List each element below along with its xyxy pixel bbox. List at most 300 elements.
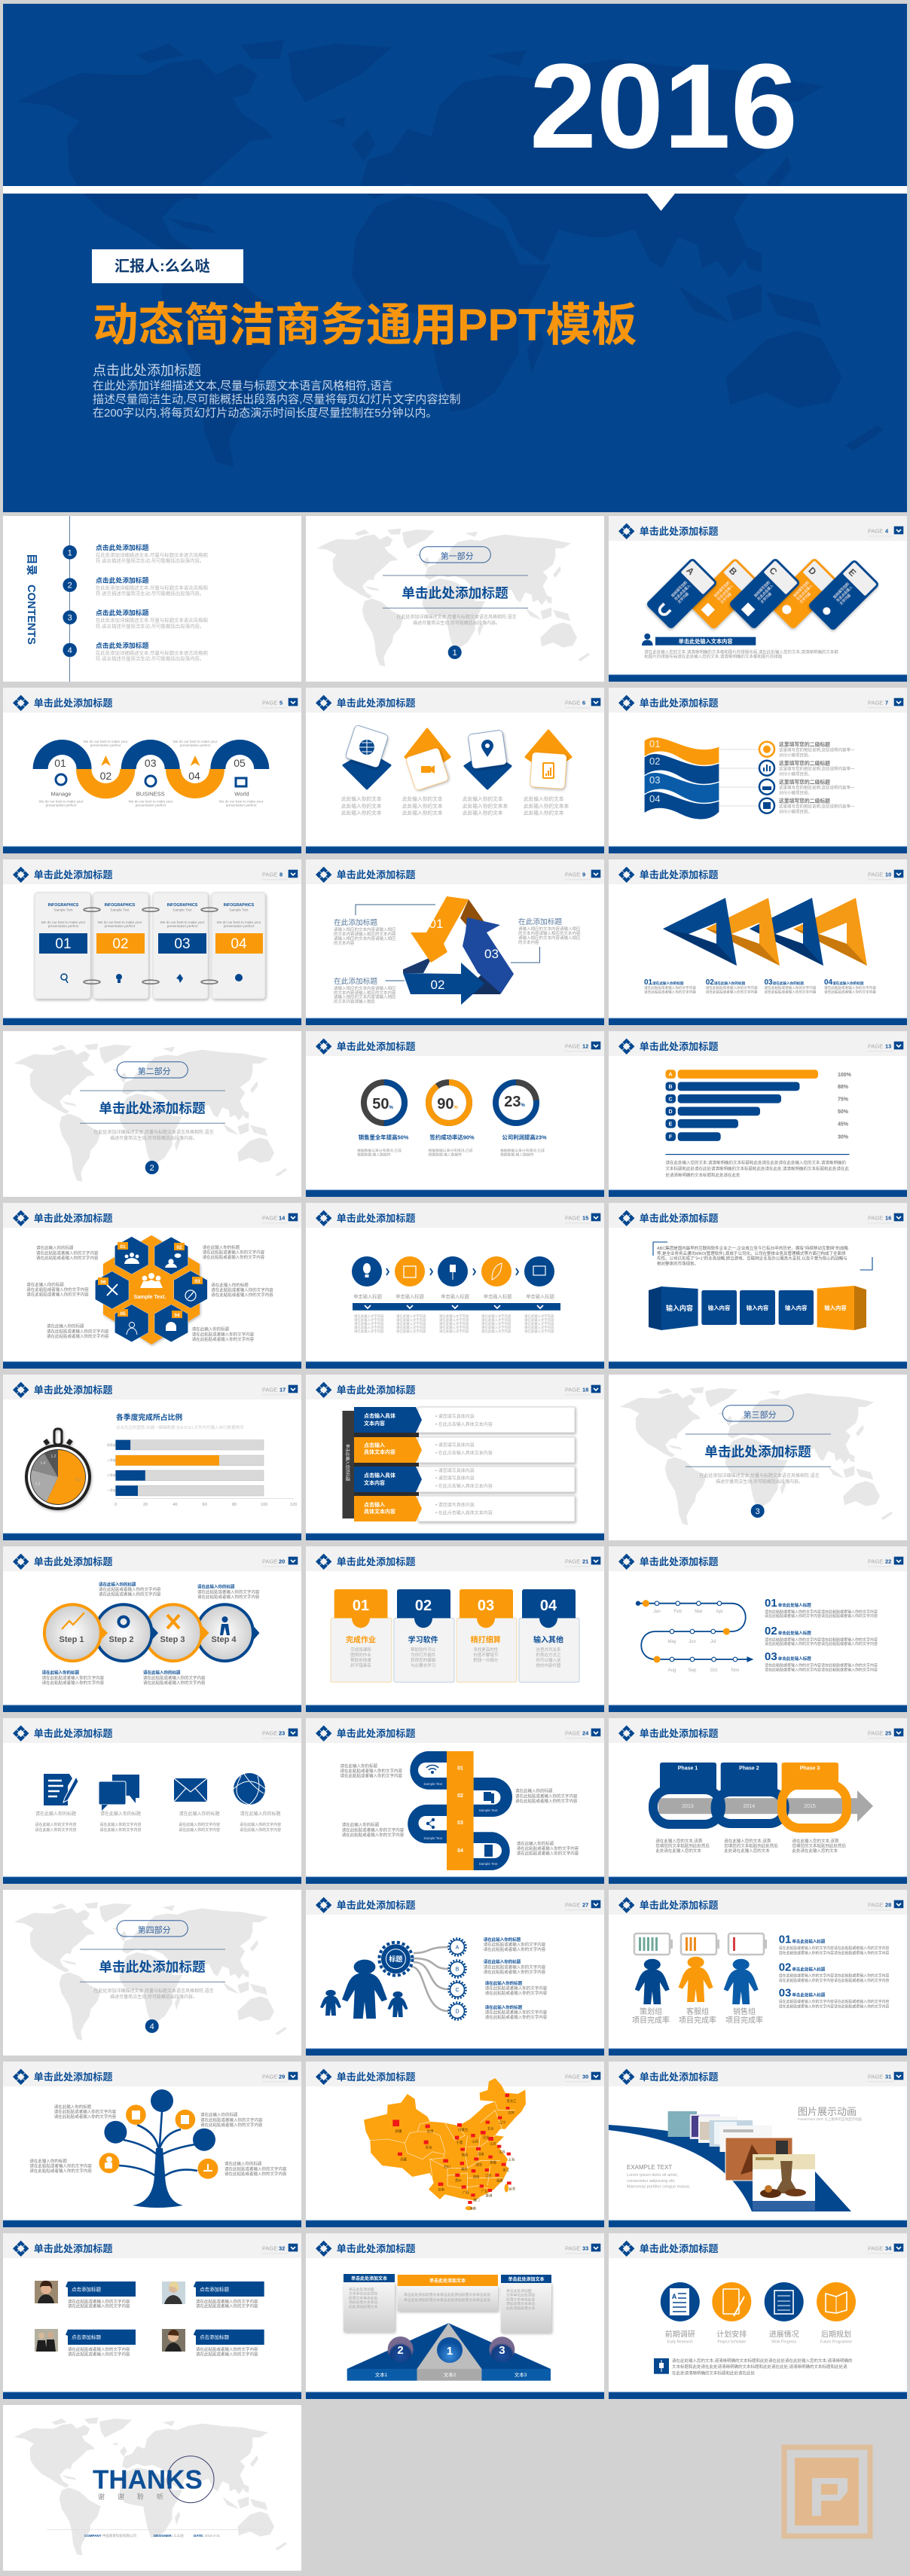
- centre label: [134, 1273, 166, 1300]
- text block left top: 的文本内容: [334, 940, 355, 946]
- slide header: PAGE: [868, 527, 883, 534]
- right card: [501, 2275, 551, 2333]
- panel: section two: 在此处添加详细描述文本,尽量与标题文本语言风格相符,语言: [93, 1131, 214, 1135]
- item 4 tablet: [526, 731, 571, 789]
- timeline path: [638, 1604, 747, 1659]
- arrow text: 点击输入具体: [364, 1473, 395, 1479]
- card captions: Sample Text: [53, 908, 73, 911]
- slide header: 15: [582, 1214, 588, 1221]
- callouts: 请在此输入你的标题: [192, 1328, 229, 1332]
- panel: section three: 第三部分: [744, 1409, 777, 1420]
- card D: 文字内容: [799, 591, 812, 605]
- sample labels: Sample Text: [479, 1862, 498, 1866]
- phase subtitles: Project Schedule: [717, 2339, 746, 2344]
- slide header: PAGE: [565, 1729, 580, 1736]
- callouts: 请在此粘贴或者输入你的文字内容: [485, 2010, 548, 2016]
- spheres: 2: [397, 2344, 404, 2357]
- slide header: [609, 2062, 907, 2227]
- step descriptions: [354, 1314, 554, 1334]
- slide header: 5: [279, 699, 282, 706]
- photo heading: 图片展示动画: [798, 2106, 857, 2117]
- phase titles: 计划安排: [716, 2329, 747, 2339]
- centre card: 单击此处添加文本: [429, 2278, 466, 2284]
- panel: slide 17 stopwatch and bars: [3, 1375, 301, 1540]
- contents item 4: 4: [68, 646, 72, 655]
- card captions: presentation perfect: [224, 924, 255, 928]
- spine numbers: 01: [457, 1766, 463, 1772]
- small gears: [449, 1939, 466, 2020]
- callouts: 请在此输入你的标题: [42, 1670, 80, 1676]
- slide header: 单击此处添加标题: [640, 868, 718, 881]
- panel: section four: 在此处添加详细描述文本,尽量与标题文本语言风格相符,语言: [93, 1989, 214, 1994]
- spheres: 1: [447, 2345, 453, 2358]
- callouts: 请在此粘贴或者输入你的文字内容: [211, 1292, 273, 1298]
- panel: section one: 第一部分: [441, 551, 474, 561]
- step labels: 单击输入标题: [395, 1293, 425, 1300]
- stopwatch pie: 8.2: [76, 1478, 81, 1482]
- donut 90 percent: 90%: [437, 1096, 458, 1113]
- slide header: 33: [582, 2245, 588, 2251]
- description: 在200字以内,将每页幻灯片动态演示时间长度尽量控制在5分钟以内。: [93, 407, 438, 420]
- callouts: 请在此粘贴或者输入你的文字内容: [485, 2014, 548, 2020]
- blue swoosh: [609, 2125, 851, 2211]
- gear letters: A: [456, 1945, 460, 1951]
- triangle 2: 02项目键入: [716, 934, 744, 957]
- number tags: 03: [194, 1279, 200, 1284]
- bar values: 45%: [838, 1122, 849, 1127]
- column text: 帮助软件可以: [411, 1648, 435, 1653]
- bar values: 100%: [838, 1073, 852, 1078]
- card B: B: [727, 566, 739, 578]
- callouts: [26, 1244, 273, 1342]
- centre card: 单击此处添加段落文本单击此处添加段落文本单击此处: [404, 2297, 490, 2303]
- callouts: 请在此粘贴或者输入你的文字内容: [47, 1328, 109, 1334]
- callouts: 请在此输入你的标题: [200, 2114, 238, 2118]
- icon: chat bubbles: [99, 1775, 139, 1811]
- donut notes: [357, 1148, 545, 1157]
- slide header: 单击此处添加标题: [640, 1727, 718, 1739]
- panel: slide 7 wave list: [609, 688, 907, 853]
- arrow text: 具体文本内容: [364, 1448, 395, 1455]
- bar letters: F: [669, 1135, 673, 1140]
- month labels: [653, 1610, 739, 1673]
- right 3D box: 输入内容: [824, 1305, 847, 1311]
- list text: 这里填写您的相应说明,这些说明内容单一: [779, 765, 855, 771]
- panel: slide 6 tilted cards: [306, 688, 604, 853]
- slide header: 29: [279, 2073, 285, 2080]
- card C: [728, 557, 801, 630]
- step descriptions: 请在此输入文字内容: [524, 1329, 554, 1334]
- slide header: [3, 688, 301, 853]
- right card: 添加段落文本单击: [506, 2301, 536, 2306]
- step labels: [353, 1293, 555, 1300]
- small texts: presentation perfect: [136, 804, 166, 807]
- card captions: Sample Text: [173, 908, 192, 911]
- triangle arrows: [403, 896, 514, 1005]
- phase tabs: Phase 2: [739, 1766, 759, 1772]
- step descriptions: 请在此输入文字内容: [524, 1317, 554, 1323]
- callouts: 请在此粘贴或者输入你的文字内容: [484, 1946, 546, 1952]
- panel: slide 23 four icons: [3, 1718, 301, 1884]
- step descriptions: 请在此输入文字内容: [439, 1321, 469, 1326]
- number blocks: 01: [55, 936, 72, 952]
- member text: 请在此粘贴或者输入你的文字内容: [68, 2303, 130, 2309]
- card captions: presentation perfect: [105, 924, 136, 928]
- text block left bottom: 的文本内容请输入相应: [334, 998, 376, 1004]
- captions: [50, 791, 249, 797]
- slide header: PAGE: [868, 1729, 883, 1736]
- step descriptions: 请在此输入文字内容: [439, 1329, 469, 1334]
- arrow text: [364, 1412, 395, 1515]
- card C: 如何填写您的: [753, 581, 771, 598]
- right card: 段落文本单击此处: [506, 2297, 536, 2302]
- callouts: 请在此粘贴或者输入你的文字内容: [340, 1768, 403, 1774]
- arrow text: 文本内容: [364, 1479, 385, 1486]
- bar values: 88%: [838, 1085, 849, 1090]
- slide header: 12: [582, 1042, 588, 1049]
- spine numbers: 03: [457, 1821, 463, 1826]
- column captions: 请在此粘贴或者输入你的文字内容: [706, 985, 758, 990]
- icon: envelope: [174, 1778, 207, 1802]
- slide header: 16: [885, 1214, 891, 1221]
- list text: 这里填写您的相应说明,这些说明内容单一: [779, 803, 855, 809]
- column text: 完成授课和: [350, 1648, 371, 1653]
- left 3D box: [649, 1286, 698, 1330]
- card D: 在此点击输入: [795, 583, 814, 602]
- callouts: 请在此粘贴或者输入你的文字内容: [54, 2109, 117, 2115]
- column captions: 请在此粘贴或者输入你的文字内容: [644, 990, 696, 994]
- panel: section four: 第四部分: [138, 1924, 171, 1935]
- item labels: 此处输入你的文本: [341, 810, 382, 816]
- china map: 河北: [482, 2135, 490, 2141]
- contents item 2: [63, 575, 208, 597]
- china map: 安徽: [490, 2160, 497, 2165]
- description: 在此处添加详细描述文本,尽量与标题文本语言风格相符,语言: [93, 380, 392, 392]
- number tags: 02: [176, 1245, 182, 1250]
- slide header: 20: [279, 1558, 285, 1564]
- china map: 山西: [472, 2138, 479, 2144]
- month labels: Nov: [731, 1668, 739, 1673]
- chart title: 点击左边的图表,右键一编辑数据,在EXCEL文件内可输入自行数据排序: [116, 1424, 244, 1430]
- panel: slide 28 batteries and people: [609, 1890, 907, 2056]
- callouts: 请在此粘贴或者输入你的文字内容: [54, 2114, 117, 2120]
- chart notes: 文本标题和此处请在此处请清晰明确的文本标题和此处请在此处,请清晰明确的文本标题和此处请在此: [666, 1166, 850, 1172]
- slide header: 25: [885, 1729, 891, 1736]
- card B: 在此点击输入: [716, 583, 734, 602]
- slide header: PAGE: [565, 1214, 580, 1221]
- item 1 globe: [344, 725, 390, 789]
- blue nodes: [104, 2089, 215, 2151]
- slide header: PAGE: [868, 2245, 883, 2251]
- slide header: PAGE: [262, 1214, 277, 1221]
- entry 03: [779, 1987, 890, 2009]
- column titles: 完成作业: [346, 1634, 376, 1645]
- slide header: [3, 859, 301, 1025]
- callouts: 请在此粘贴或者输入你的文字内容: [197, 1594, 260, 1600]
- footer info: DESIGNER:: [154, 2534, 173, 2538]
- entry 03: 03单击此处输入标题: [765, 1650, 811, 1663]
- callouts: 请在此输入你的标题: [485, 2004, 523, 2010]
- middle boxes: 输入内容: [747, 1305, 769, 1311]
- list text: 这里填写您的二级标题: [779, 761, 830, 767]
- slide header: PAGE: [868, 871, 883, 877]
- item labels: 此处输入你的文本本: [524, 802, 569, 809]
- entry 03: 03单击此处输入标题: [779, 1987, 826, 1999]
- slide header: 单击此处添加标题: [337, 1040, 415, 1052]
- bullet text: • 请您填写具体内容: [435, 1503, 475, 1508]
- number tabs: 01: [353, 1598, 369, 1614]
- phase tabs: [660, 1763, 838, 1790]
- year labels: 2015: [804, 1804, 816, 1809]
- slide header: [3, 1718, 301, 1884]
- icon captions: 请在此输入你的标题: [100, 1811, 141, 1817]
- step descriptions: 请在此输入文字内容: [396, 1329, 426, 1334]
- small texts: [39, 740, 264, 807]
- column captions: 请在此粘贴或者输入你的文字内容: [824, 985, 876, 990]
- callouts: 请在此粘贴或者输入你的文字内容: [26, 1291, 89, 1297]
- slide header: [609, 516, 907, 682]
- china map: 内蒙古: [458, 2127, 469, 2132]
- callouts: 请在此输入你的标题: [484, 1937, 521, 1943]
- contents item 1: [63, 543, 208, 564]
- arrow blocks: [354, 1407, 422, 1521]
- bar chart: 20: [143, 1503, 148, 1507]
- small texts: presentation perfect: [180, 743, 211, 747]
- bottom icons: [61, 974, 243, 983]
- gear letters: D: [455, 2010, 460, 2014]
- entry 01: 01单击此处输入标题: [765, 1597, 811, 1610]
- column text: 这里并列关系: [536, 1648, 561, 1653]
- column text: 帮助你快速: [350, 1657, 371, 1663]
- icon descriptions: 请在此输入你的文字内容: [179, 1827, 220, 1833]
- sample labels: [423, 1782, 498, 1866]
- blue icons: [56, 774, 246, 786]
- panel: section three: 描述尽量简洁生动,尽可能概括出段落内容。: [716, 1479, 803, 1485]
- circle glyphs: A: [672, 2293, 677, 2300]
- number blocks: 04: [231, 936, 247, 952]
- portrait 1: [35, 2281, 58, 2303]
- phase text: 您填您的文本粘贴到此处然后: [792, 1842, 847, 1848]
- slide header: 7: [885, 699, 888, 706]
- step descriptions: 请在此输入文字内容: [481, 1314, 511, 1318]
- entry 02: 请在此粘贴或者输入你的文字内容请在此粘贴或者输入你的文字内容: [765, 1637, 878, 1642]
- entry 01: 请在此粘贴或者输入你的文字内容请在此粘贴或者输入你的文字内容: [779, 1947, 889, 1951]
- callouts: 请在此粘贴或者输入你的文字内容: [484, 1969, 546, 1975]
- entry 02: 02单击此处输入标题: [779, 1961, 826, 1973]
- slide header: 21: [582, 1558, 588, 1564]
- list text: [779, 741, 855, 815]
- number tags: 06: [100, 1280, 106, 1285]
- example text: Maecenas porttitor congue massa.: [627, 2185, 691, 2190]
- phase text: 您填您的文本粘贴到此处然后: [724, 1842, 778, 1848]
- quote text: 先性。公司已形成了"3+1"的业务战略,即云游戏、互联网企业及办公服务大支柱,以及于营为核心的战略与: [657, 1256, 847, 1262]
- pyramid: 文本1: [375, 2371, 388, 2378]
- card captions: [41, 908, 261, 928]
- callouts: 请在此粘贴或者输入你的文字内容: [29, 2163, 92, 2169]
- slide header: PAGE: [565, 1042, 580, 1049]
- column text: 好不错具有: [350, 1662, 371, 1668]
- callouts: 请在此粘贴或者输入你的文字内容: [200, 2122, 263, 2128]
- slide header: PAGE: [262, 1558, 277, 1564]
- china map: 贵州: [455, 2178, 462, 2184]
- side bar: [342, 1411, 354, 1518]
- sample labels: Sample Text: [479, 1808, 498, 1812]
- slide header: [3, 1546, 301, 1712]
- quote text: 相对整体的市场规划。: [657, 1260, 698, 1266]
- presenter tag: [92, 249, 243, 283]
- panel: slide 5 wave arches: [3, 688, 301, 853]
- right card: 此处添加段落文本: [506, 2306, 536, 2311]
- blue ribbon: [353, 1303, 560, 1311]
- spheres: 3: [499, 2344, 505, 2357]
- entry 03: 请在此粘贴或者输入你的文字内容请在此粘贴或者输入你的文字内容: [765, 1663, 878, 1668]
- china map: 山东: [490, 2141, 497, 2147]
- step descriptions: 请在此输入文字内容: [396, 1325, 426, 1330]
- circles: [352, 1256, 554, 1286]
- number tabs: [334, 1589, 576, 1628]
- slide header: [3, 1375, 301, 1540]
- callouts: 请在此输入你的标题: [47, 1325, 84, 1329]
- panel: slide 8 infographic cards: [3, 859, 301, 1025]
- panel: slide 29 tree diagram: [3, 2062, 301, 2227]
- left card: [344, 2274, 395, 2332]
- bullet text: • 请您填写具体内容: [435, 1469, 475, 1473]
- callouts: 请在此粘贴或者输入你的文字内容: [224, 2165, 287, 2172]
- slide header: [306, 2062, 604, 2227]
- column text: 图例的作业: [350, 1652, 371, 1658]
- captions: Manage: [50, 791, 72, 797]
- month labels: Aug: [668, 1668, 676, 1673]
- callouts: 请在此输入你的标题: [26, 1283, 64, 1287]
- triangle 3: 03项目键入: [759, 934, 788, 957]
- portrait 4: [162, 2329, 185, 2352]
- month labels: Jan: [653, 1610, 661, 1614]
- phase titles: 进展情况: [769, 2329, 799, 2339]
- panel: section two: 2: [150, 1164, 154, 1173]
- donut notes: 根据数据,输入数据符: [500, 1152, 534, 1157]
- phase text: 请在此输入您的文本,该首: [792, 1839, 839, 1844]
- column captions: 03请在此输入你的标题: [764, 978, 804, 987]
- step descriptions: 请在此输入文字内容: [354, 1325, 384, 1330]
- left 3D box: 输入内容: [666, 1304, 693, 1312]
- panel: slide 21 numbered columns: [306, 1546, 604, 1712]
- callouts: 请在此粘贴或者输入你的文字内容: [26, 1286, 89, 1293]
- entry 02: 请在此粘贴或者输入你的文字内容请在此粘贴或者输入你的文字内容: [765, 1641, 878, 1647]
- slide header: [609, 859, 907, 1025]
- slide header: PAGE: [868, 1558, 883, 1564]
- stopwatch pie: [25, 1429, 91, 1510]
- entry 02: 02单击此处输入标题: [765, 1625, 811, 1637]
- callouts: [42, 1581, 260, 1686]
- phase text: [655, 1838, 847, 1854]
- icon: document: [44, 1774, 78, 1805]
- note icon: [654, 2358, 669, 2374]
- donut captions: 签约成功率达90%: [429, 1134, 475, 1140]
- icon descriptions: 请在此输入你的文字内容: [35, 1827, 77, 1833]
- slide header: 单击此处添加标题: [337, 1212, 415, 1224]
- china map: 北京: [487, 2126, 494, 2131]
- slide header: PAGE: [262, 1729, 277, 1736]
- step descriptions: 请在此输入文字内容: [524, 1325, 554, 1330]
- orange hexagon: [103, 1235, 200, 1344]
- item labels: 此处输入你的文本: [524, 810, 564, 816]
- member text: 请在此粘贴或者输入你的文字内容: [68, 2300, 130, 2304]
- note text: 在此处请清晰明确的文本标题和此处请在此处: [672, 2370, 756, 2376]
- callouts: 请在此粘贴或者输入你的文字内容: [36, 1255, 99, 1261]
- entry 02: 请在此粘贴或者输入你的文字内容请在此粘贴或者输入你的文字内容: [779, 1978, 890, 1983]
- column captions: 请在此粘贴或者输入你的文字内容: [764, 990, 817, 994]
- year labels: 2013: [682, 1804, 694, 1809]
- number tags: [98, 1242, 203, 1318]
- bullet text: • 在此点击输入具体文本内容: [435, 1483, 493, 1489]
- bar letters: E: [669, 1122, 673, 1127]
- card B: 如何填写您的: [713, 581, 731, 598]
- middle boxes: 输入内容: [785, 1305, 808, 1311]
- text block left bottom: 在此添加标题: [334, 976, 377, 986]
- callouts: 请在此输入你的标题: [484, 1959, 521, 1965]
- text block left bottom: 请输入相应的文本内容请输入相应: [334, 987, 396, 991]
- callouts: 请在此粘贴或者输入你的文字内容: [485, 1990, 548, 1996]
- panel: section two: [3, 1031, 301, 1197]
- panel: slide 30 china map: [306, 2062, 604, 2227]
- slide header: [306, 688, 604, 853]
- slide header: 10: [885, 871, 891, 877]
- slide header: [306, 1031, 604, 1197]
- wave numbers: 04: [649, 793, 660, 804]
- contents item 3: 3: [68, 614, 72, 623]
- column text: 他的内容代替: [536, 1662, 561, 1668]
- bullet text: • 在此点击输入具体文本内容: [435, 1450, 493, 1456]
- callouts: 请在此输入你的标题: [224, 2162, 262, 2167]
- year 2016: 2016: [530, 38, 798, 173]
- contents item 3: [63, 609, 208, 629]
- light cards: [331, 1618, 579, 1682]
- card A: A: [684, 565, 697, 578]
- quote text: ABC集团是国内最早的互联网软件企业之一,企业成立至今已有25年的历史。拥有"持续移动互联网"的战略: [657, 1247, 848, 1251]
- slide header: 单击此处添加标题: [337, 2242, 415, 2254]
- slide header: [609, 2233, 907, 2399]
- white cards: [418, 1407, 575, 1521]
- quote brackets: [653, 1242, 872, 1270]
- group labels: 销售组: [733, 2008, 756, 2016]
- column titles: 输入其他: [533, 1634, 563, 1645]
- slide header: [306, 1890, 604, 2056]
- triangle 2: [706, 898, 780, 966]
- text block right: 请输入相应的文本内容请输入相应: [518, 927, 581, 932]
- callouts: 请在此粘贴或者输入你的文字内容: [340, 1773, 403, 1779]
- centre label: Sample Text.: [134, 1295, 166, 1300]
- slide header: 9: [582, 871, 585, 877]
- china map: 台湾: [508, 2187, 516, 2192]
- phase text: 此处请在此输入您的文本: [724, 1848, 770, 1854]
- entry 03: 请在此粘贴或者输入你的文字内容请在此粘贴或者输入你的文字内容: [765, 1668, 878, 1672]
- item labels: [341, 795, 569, 816]
- slide header: PAGE: [868, 1901, 883, 1908]
- card text: INFOGRAPHICS: [224, 903, 255, 908]
- slide header: 单击此处添加标题: [337, 1727, 415, 1739]
- callouts: 请在此粘贴或者输入你的文字内容: [484, 1942, 546, 1948]
- example text: EXAMPLE TEXT: [627, 2164, 672, 2171]
- orange spine: [447, 1751, 474, 1870]
- small texts: presentation perfect: [90, 743, 121, 747]
- slide header: PAGE: [565, 699, 580, 706]
- step 3: [145, 1604, 209, 1661]
- column titles: 学习软件: [408, 1634, 438, 1645]
- chart notes: 处请清晰明确的文本标题和此处请在此处: [666, 1172, 741, 1178]
- phase subtitles: [667, 2339, 852, 2344]
- bar values: [838, 1073, 852, 1140]
- horizontal bars: [678, 1070, 818, 1141]
